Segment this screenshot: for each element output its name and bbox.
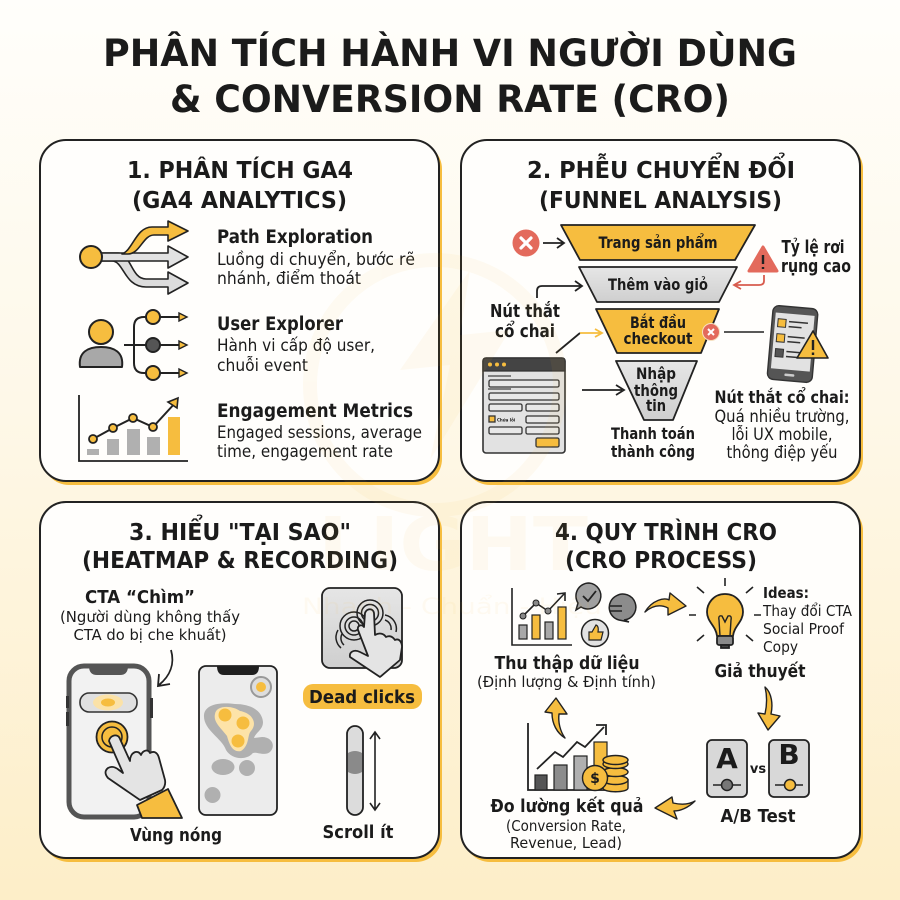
- heading: heatmap: 3. HIỂU "TẠI SAO": [129, 515, 351, 546]
- arrow: form to checkout: [556, 329, 602, 353]
- heading: GA4: [127, 156, 353, 214]
- callout: bottleneck: [490, 301, 560, 342]
- icon: small error on checkout: [702, 324, 720, 340]
- icon: pointing hand: [106, 735, 182, 818]
- label: hypothesis: Giả thuyết: [714, 661, 806, 682]
- callout: sunken CTA: (Người dùng không thấy: [60, 608, 240, 626]
- icon: path exploration: [80, 221, 188, 294]
- heading: GA4: 1. PHÂN TÍCH GA4: [127, 156, 353, 184]
- text: measure results: Revenue, Lead): [510, 834, 622, 852]
- watermark: LIGHT: [318, 502, 589, 588]
- callout: bottleneck: Nút thắt: [490, 301, 560, 322]
- text: path exploration: nhánh, điểm thoát: [217, 269, 361, 288]
- funnel chart: Bắt đầu: [630, 313, 686, 332]
- icon: warning: [749, 247, 777, 271]
- phone: heatmap: [199, 666, 277, 815]
- arrow: to A/B test: [758, 687, 780, 730]
- funnel chart: tin: [646, 396, 666, 415]
- panel: CRO process: [461, 502, 863, 862]
- callout: bottleneck: cổ chai: [495, 320, 555, 342]
- text: bottleneck reasons: thông điệp yếu: [726, 443, 838, 462]
- text: user explorer: [217, 314, 375, 375]
- label: hot zone: Vùng nóng: [130, 825, 222, 846]
- text: ideas: [762, 584, 853, 656]
- heading: heatmap: (HEATMAP & RECORDING): [82, 548, 398, 574]
- icon: engagement chart: [79, 395, 188, 461]
- icon: A/B test: A: [716, 742, 738, 775]
- icon: light bulb: [689, 578, 761, 648]
- icon: results chart with coins: $: [590, 771, 600, 787]
- icon: speech bubbles: [576, 583, 636, 646]
- text: bottleneck reasons: [714, 388, 850, 462]
- text: ideas: Social Proof: [763, 620, 845, 638]
- icon: results chart with coins: [528, 723, 628, 792]
- text: bottleneck reasons: lỗi UX mobile,: [732, 425, 832, 444]
- arrow: bottleneck to cart: [537, 281, 582, 298]
- icon: mobile warning: [767, 305, 828, 383]
- watermark: Nhanh - Chuẩn - Hiệu: [302, 595, 602, 620]
- text: collect data: (Định lượng & Định tính): [477, 673, 656, 691]
- arrow: error to product page: [543, 238, 564, 248]
- label: successful payment: thành công: [611, 442, 695, 461]
- text: path exploration: Luồng di chuyển, bước rẽ: [217, 250, 415, 269]
- panel: funnel analysis: [461, 140, 863, 485]
- arrow: to measure: [655, 797, 695, 819]
- icon: scroll bar: [347, 726, 380, 815]
- icon: dead clicks: [322, 588, 402, 677]
- title: PHÂN TÍCH HÀNH VI NGƯỜI DÙNG: [103, 31, 797, 75]
- heading: CRO: 4. QUY TRÌNH CRO: [555, 518, 777, 546]
- icon: A/B test: vs: [750, 762, 766, 777]
- funnel chart: [561, 225, 755, 420]
- text: measure results: [490, 796, 644, 852]
- text: bottleneck reasons: Nút thắt cổ chai:: [714, 388, 850, 407]
- icon: form window: Chứa lỗi: [497, 418, 516, 422]
- heading: heatmap: [82, 515, 398, 574]
- text: ideas: Ideas:: [763, 584, 809, 602]
- text: collect data: Thu thập dữ liệu: [494, 653, 640, 674]
- icon: form window: [483, 358, 565, 453]
- label: successful payment: Thanh toán: [611, 424, 695, 443]
- icon: user explorer: [80, 310, 187, 380]
- callout: high drop rate: rụng cao: [781, 257, 851, 277]
- heading: funnel: (FUNNEL ANALYSIS): [539, 188, 782, 214]
- label: successful payment: [611, 424, 695, 461]
- icon: data collection chart: [512, 588, 572, 645]
- watermark: [302, 260, 602, 620]
- connector: checkout to phone: [724, 331, 764, 333]
- text: measure results: (Conversion Rate,: [506, 817, 626, 835]
- label: A/B test: A/B Test: [720, 806, 796, 827]
- funnel chart: Thêm vào giỏ: [608, 275, 708, 294]
- panel: heatmap and recording: [40, 502, 442, 862]
- funnel chart: Trang sản phẩm: [598, 233, 718, 252]
- text: user explorer: User Explorer: [217, 314, 344, 335]
- text: engagement metrics: Engagement Metrics: [217, 401, 413, 422]
- callout: high drop rate: Tỷ lệ rơi: [782, 238, 844, 258]
- text: engagement metrics: time, engagement rate: [217, 442, 393, 461]
- arrow: red drop rate: [734, 275, 764, 289]
- panel: GA4 analytics: [40, 140, 442, 485]
- callout: sunken CTA: [60, 587, 240, 644]
- callout: high drop rate: [781, 238, 851, 277]
- title: [103, 31, 797, 121]
- text: ideas: Copy: [763, 638, 798, 656]
- text: path exploration: Path Exploration: [217, 227, 373, 248]
- funnel chart: checkout: [624, 329, 693, 348]
- arrow: form to info step: [582, 385, 624, 395]
- text: path exploration: [217, 227, 415, 288]
- heading: CRO: [555, 518, 777, 574]
- arrow: to hypothesis: [645, 593, 686, 615]
- text: user explorer: chuỗi event: [217, 356, 308, 375]
- text: engagement metrics: Engaged sessions, average: [217, 423, 422, 442]
- heading: funnel: 2. PHỄU CHUYỂN ĐỔI: [527, 152, 795, 184]
- title: & CONVERSION RATE (CRO): [170, 78, 730, 121]
- funnel chart: thông: [634, 381, 678, 400]
- arrow: back to data: [545, 698, 567, 738]
- callout: sunken CTA: CTA do bị che khuất): [74, 626, 226, 644]
- heading: CRO: (CRO PROCESS): [565, 548, 757, 574]
- icon: A/B test: [707, 738, 809, 797]
- phone with CTA and hand: [66, 666, 182, 818]
- text: bottleneck reasons: Quá nhiều trường,: [714, 407, 850, 426]
- icon: red error: [512, 230, 540, 256]
- label: low scroll: Scroll ít: [322, 822, 394, 843]
- text: engagement metrics: [217, 401, 422, 461]
- text: user explorer: Hành vi cấp độ user,: [217, 336, 375, 355]
- funnel chart: Nhập: [636, 364, 676, 383]
- text: collect data: [477, 653, 656, 691]
- label: dead clicks: Dead clicks: [309, 687, 415, 708]
- text: ideas: Thay đổi CTA: [762, 602, 853, 620]
- arrow: to phone: [158, 650, 172, 686]
- heading: funnel: [527, 152, 795, 214]
- callout: sunken CTA: CTA “Chìm”: [85, 587, 195, 608]
- icon: A/B test: B: [778, 738, 800, 771]
- text: measure results: Đo lường kết quả: [490, 796, 644, 817]
- heading: GA4: (GA4 ANALYTICS): [132, 188, 347, 214]
